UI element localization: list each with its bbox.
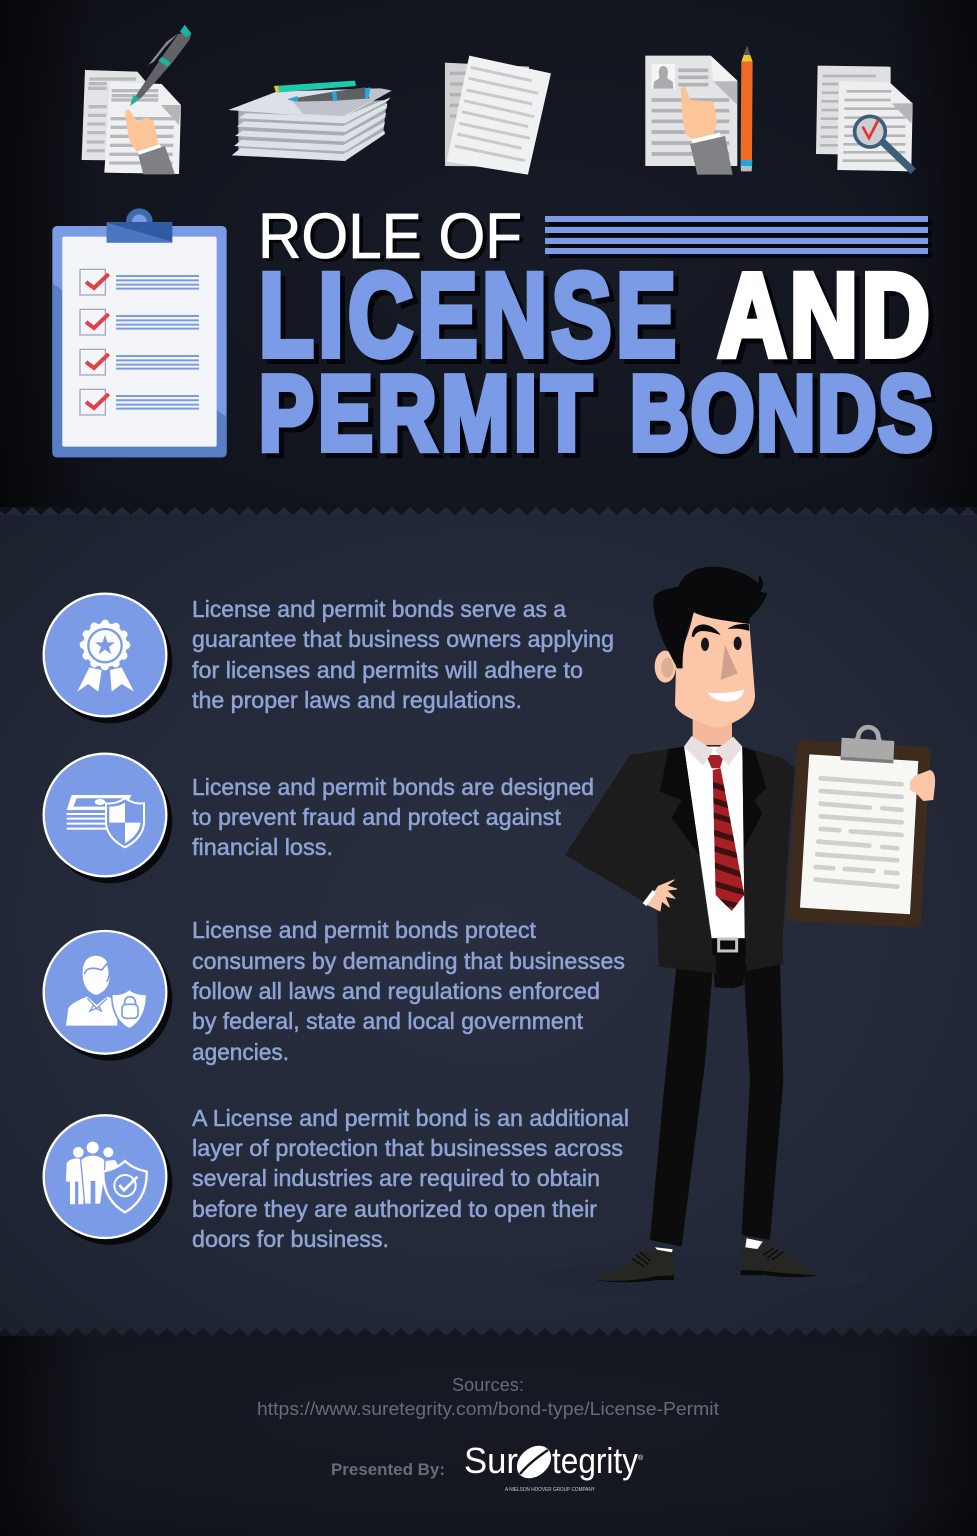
collar xyxy=(684,736,742,766)
icon: resume with hand and pencil xyxy=(645,46,753,175)
text block 3: License and permit bonds protect xyxy=(192,917,537,943)
tie xyxy=(712,768,744,911)
text block 2: License and permit bonds are designed xyxy=(192,774,594,800)
title line: LICENSE AND: LICENSE xyxy=(264,255,686,386)
sources: Sources: xyxy=(452,1375,524,1395)
shirt xyxy=(684,747,745,938)
logo: Suretegrity: A NIELSON HOOVER GROUP COMPANY xyxy=(505,1487,595,1493)
text block 4: layer of protection that businesses across xyxy=(192,1135,623,1161)
icon: clipboard checklist xyxy=(52,208,227,457)
text block 1: the proper laws and regulations. xyxy=(192,687,522,713)
title line: LICENSE AND: AND xyxy=(723,253,938,386)
text block 1 xyxy=(192,596,614,713)
text block 2 xyxy=(192,774,594,860)
icon: stack of papers with pens xyxy=(228,81,392,161)
text block 2: to prevent fraud and protect against xyxy=(192,804,562,830)
checklist row 3 xyxy=(80,349,199,375)
legs and shoes xyxy=(596,930,819,1282)
eyebrows, eyes and nose xyxy=(692,624,749,702)
background: footer band xyxy=(0,1336,977,1536)
text block 4 xyxy=(192,1105,629,1252)
title: Role of License and Permit Bonds xyxy=(258,200,940,478)
title line: LICENSE AND xyxy=(259,248,938,386)
background: middle panel xyxy=(0,515,977,1337)
belt and buckle xyxy=(712,938,746,955)
icon: documents with magnifying glass xyxy=(816,66,913,171)
illustration: businessman holding clipboard xyxy=(532,567,935,1295)
text block 2: financial loss. xyxy=(192,834,333,860)
logo leaf xyxy=(510,1439,558,1485)
icon badge: team with check shield xyxy=(44,1115,172,1245)
logo: Suretegrity: ® xyxy=(638,1454,644,1462)
checklist row 1 xyxy=(80,269,199,295)
text block 3: consumers by demanding that businesses xyxy=(192,948,625,974)
title line: PERMIT BONDS: PERMIT xyxy=(259,354,596,473)
presented by label: Presented By: xyxy=(331,1460,445,1479)
checklist row 4 xyxy=(80,389,199,415)
icon: hand signing papers with pen xyxy=(82,25,191,174)
text block 4: several industries are required to obtain xyxy=(192,1165,600,1191)
text block 1: License and permit bonds serve as a xyxy=(192,596,566,622)
text block 4: before they are authorized to open their xyxy=(192,1196,597,1222)
text block 3: by federal, state and local government xyxy=(192,1008,584,1034)
text block 3: agencies. xyxy=(192,1039,289,1065)
text block 1: for licenses and permits will adhere to xyxy=(192,657,583,683)
face xyxy=(675,612,755,728)
sources: https://www.suretegrity.com/bond-type/License-Permit xyxy=(257,1399,719,1419)
neck and ear xyxy=(655,651,732,745)
hip hand xyxy=(643,880,677,911)
title line: PERMIT BONDS: BONDS xyxy=(630,354,935,473)
logo: Suretegrity: Sur xyxy=(464,1440,518,1481)
title line: LICENSE AND: AND xyxy=(718,248,933,381)
logo: Suretegrity xyxy=(464,1439,644,1493)
text block 4: doors for business. xyxy=(192,1226,389,1252)
torso, head and clipboard xyxy=(565,567,935,955)
icon badge: award ribbon xyxy=(44,594,172,723)
ground shadow xyxy=(532,1261,868,1295)
clipboard hand xyxy=(910,770,935,801)
text block 4: A License and permit bond is an additional xyxy=(192,1105,629,1131)
title line: PERMIT BONDS: BONDS xyxy=(635,359,940,478)
icon: two sheets of paper xyxy=(445,56,551,175)
checklist row 2 xyxy=(80,309,199,335)
decorative title bars xyxy=(545,216,932,258)
jacket xyxy=(565,747,795,955)
title line: LICENSE AND: LICENSE xyxy=(259,250,681,381)
background: header band xyxy=(0,0,977,516)
text block 3 xyxy=(192,917,625,1065)
icon badge: person with padlock shield xyxy=(44,931,172,1061)
text block 1: guarantee that business owners applying xyxy=(192,626,614,652)
title line: PERMIT BONDS: PERMIT xyxy=(264,359,601,478)
sources xyxy=(257,1375,719,1419)
icon badge: money and shield xyxy=(44,754,172,883)
title line: ROLE OF: ROLE OF xyxy=(262,203,526,275)
clipboard xyxy=(787,727,931,928)
title line: PERMIT BONDS xyxy=(259,354,940,478)
hair xyxy=(653,567,767,668)
text block 3: follow all laws and regulations enforced xyxy=(192,978,600,1004)
logo: Suretegrity: tegrity xyxy=(552,1440,638,1481)
title line: ROLE OF: ROLE OF xyxy=(258,200,522,272)
